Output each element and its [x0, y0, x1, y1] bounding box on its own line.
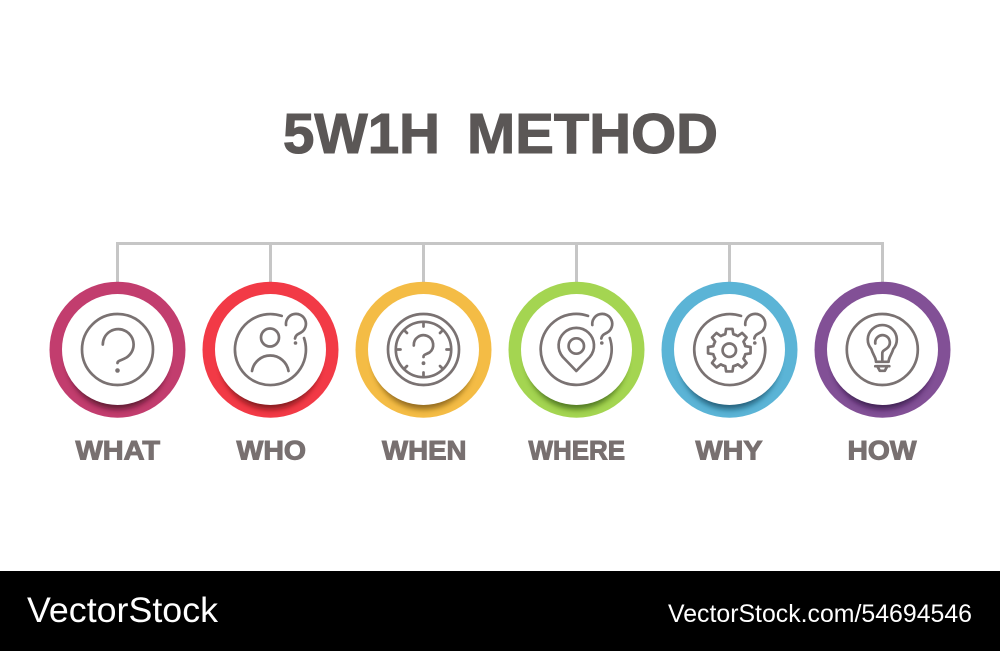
footer brand: VectorStock — [27, 591, 219, 630]
footer bar — [0, 571, 1000, 651]
icon: location pin with question — [541, 314, 612, 385]
disc: HOW — [827, 294, 938, 405]
ring: WHO — [202, 282, 338, 418]
ring: WHAT — [50, 282, 186, 418]
disc: WHAT — [62, 294, 173, 405]
shadow: WHERE — [526, 310, 626, 410]
ring: HOW — [814, 282, 950, 418]
title: 5W1H — [283, 102, 440, 166]
disc: WHY — [674, 294, 785, 405]
label: WHY: WHY — [696, 435, 763, 465]
disc: WHEN — [368, 294, 479, 405]
label: WHAT: WHAT — [76, 435, 160, 465]
icon: person with question — [235, 314, 306, 385]
label: WHO: WHO — [236, 435, 306, 465]
ring: WHEN — [356, 282, 492, 418]
ring: WHY — [662, 282, 798, 418]
item: WHEN — [356, 282, 492, 465]
shadow: WHEN — [374, 310, 474, 410]
ring: WHERE — [508, 282, 644, 418]
item: WHAT — [50, 282, 186, 465]
shadow: WHO — [220, 310, 320, 410]
title: METHOD — [467, 102, 718, 166]
label: WHEN: WHEN — [382, 435, 466, 465]
disc: WHO — [215, 294, 326, 405]
icon: clock with question — [388, 314, 459, 385]
shadow: WHY — [680, 310, 780, 410]
label: HOW: HOW — [848, 435, 916, 465]
label: WHERE: WHERE — [528, 435, 625, 465]
connector tree — [118, 244, 882, 283]
title — [283, 102, 718, 166]
shadow: HOW — [832, 310, 932, 410]
disc: WHERE — [521, 294, 632, 405]
footer image id: VectorStock.com/54694546 — [668, 600, 972, 628]
item: HOW — [814, 282, 950, 465]
icon: gear with question — [694, 314, 765, 385]
icon: light bulb with question — [847, 314, 918, 385]
item: WHO — [202, 282, 338, 465]
shadow: WHAT — [68, 310, 168, 410]
icon: question mark — [82, 314, 153, 385]
item: WHERE — [508, 282, 644, 465]
item: WHY — [662, 282, 798, 465]
